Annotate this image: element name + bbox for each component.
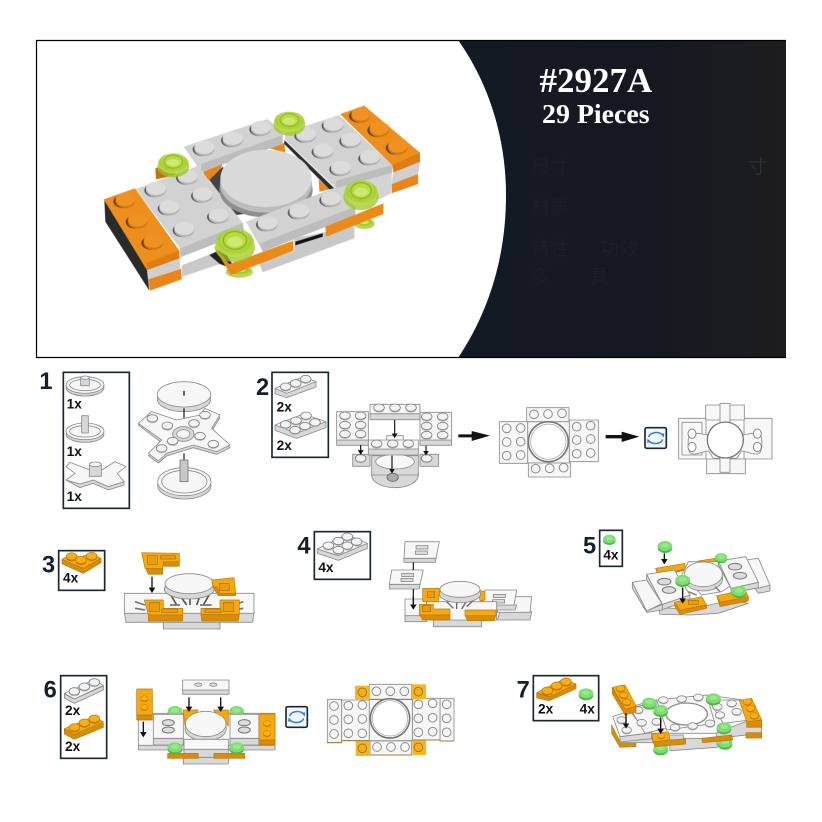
step 1: [39, 369, 452, 508]
front orange bars: [213, 203, 383, 275]
faint ghost text: 寸: [748, 156, 767, 178]
step 7 number: 7: [517, 677, 530, 703]
faint ghost text: [531, 156, 767, 288]
step 1 parts box: 1x: [67, 444, 82, 459]
faint ghost text: 材质: [531, 196, 569, 218]
step 4: [297, 532, 532, 627]
step 5: [583, 530, 770, 615]
step 2 parts box: [272, 372, 328, 457]
arrow: [606, 432, 639, 442]
step 4 parts box: [314, 532, 370, 579]
left end block: [104, 188, 236, 291]
step 2 number: 2: [256, 375, 269, 401]
lime studs: [157, 112, 379, 262]
step 3 parts box: [59, 551, 105, 590]
rotate icon: [645, 428, 666, 448]
step 5 assembly: [632, 541, 770, 615]
faint ghost text: 尺寸: [531, 156, 569, 178]
front plate: [246, 187, 355, 252]
faint ghost text: 具: [590, 267, 609, 288]
step 6 assembly: [137, 680, 275, 764]
step 7 assembly: [612, 685, 762, 755]
step 3 number: 3: [42, 553, 55, 579]
step 1 parts box: [63, 372, 129, 508]
step 1 number: 1: [39, 369, 53, 395]
step 6 flat result: [286, 684, 454, 756]
step 5 number: 5: [583, 533, 596, 559]
step 1 exploded assembly: [138, 382, 230, 499]
spinner model: [104, 106, 420, 291]
top plate: [184, 119, 283, 172]
step 2 parts box: 2x: [277, 438, 292, 453]
rotate icon: [286, 707, 307, 727]
step 4 assembly: [389, 542, 532, 627]
faint ghost text: 功效: [600, 238, 638, 260]
step 3 parts box: 4x: [63, 571, 79, 586]
step 2 assembly: [337, 404, 452, 488]
step 6 parts box: [61, 676, 107, 758]
faint ghost text: 多: [531, 266, 550, 288]
centre disc: [219, 150, 313, 217]
flipped assembly underside: [679, 403, 772, 474]
step 7: [517, 676, 762, 755]
piece count: 29 Pieces: [542, 99, 650, 130]
hero panel: [36, 40, 786, 358]
faint ghost text: 特性: [531, 238, 569, 260]
step 3: [42, 551, 254, 629]
step 1 parts box: 1x: [67, 489, 82, 504]
step 6: [44, 676, 275, 764]
hero white background with curved edge: [36, 40, 506, 358]
back lime studs and undersides: [155, 143, 392, 278]
step 3 assembly: [124, 553, 254, 629]
step 2 parts box: 2x: [277, 400, 292, 415]
step 4 number: 4: [297, 533, 311, 559]
flat top view with orange corners: [327, 684, 454, 756]
flat plates top view: [499, 408, 598, 477]
step 4 parts box: 4x: [318, 560, 334, 575]
step 7 parts box: 4x: [580, 701, 595, 716]
step 1 parts box: 1x: [67, 397, 82, 412]
product title: #2927A: [540, 61, 653, 100]
front underside: [259, 226, 354, 272]
step 2 flat result: [458, 403, 772, 477]
step 6 parts box: 2x: [65, 739, 81, 754]
step 7 parts box: [533, 676, 599, 721]
step 5 parts box: 4x: [603, 547, 619, 562]
step 6 number: 6: [44, 677, 57, 703]
arrow: [458, 431, 490, 441]
right plate and end: [284, 106, 420, 193]
hero frame: [36, 40, 786, 358]
step 5 parts box: [600, 530, 622, 566]
hero dark background: [36, 40, 786, 358]
left plate: [136, 166, 244, 257]
step 6 parts box: 2x: [65, 703, 81, 718]
step 7 parts box: 2x: [538, 701, 554, 716]
